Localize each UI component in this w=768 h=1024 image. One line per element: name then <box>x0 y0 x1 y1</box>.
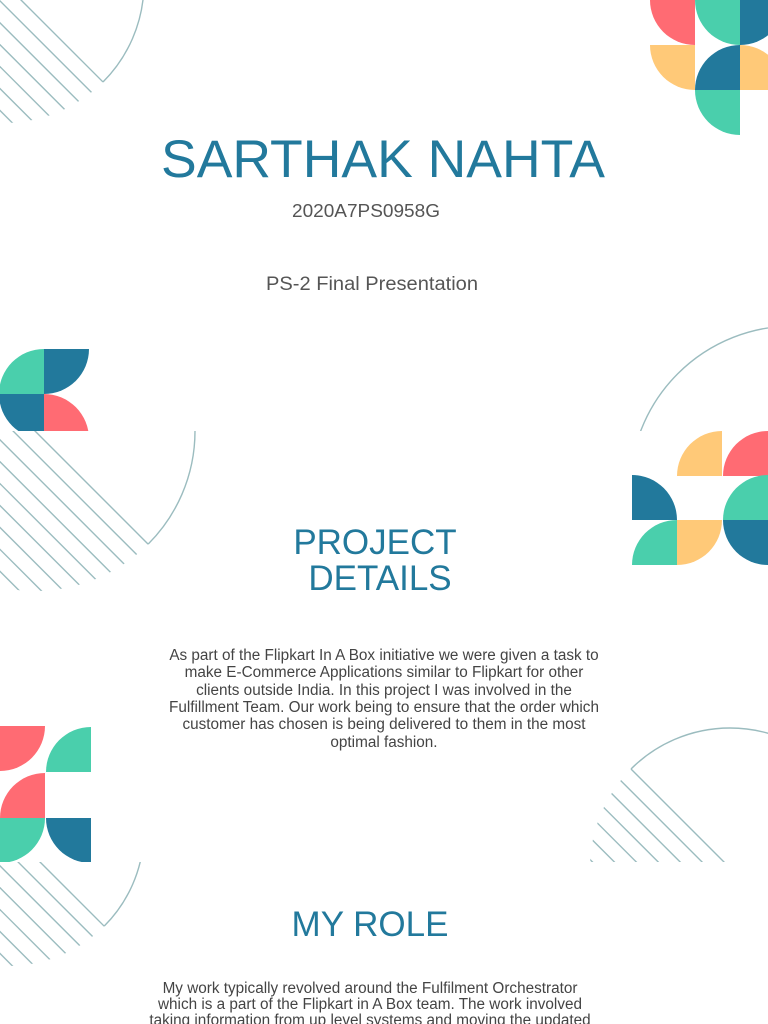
paragraph: project details: make E-Commerce Applications similar to Flipkart for other <box>185 664 583 681</box>
paragraph: my role: which is a part of the Flipkart in A Box team. The work involved <box>157 996 582 1013</box>
title: SARTHAK NAHTA <box>161 130 606 189</box>
paragraph: my role: My work typically revolved around the Fulfilment Orchestrator <box>163 980 577 997</box>
paragraph: project details: clients outside India. In this project I was involved in the <box>196 682 572 699</box>
heading: project details: PROJECT <box>293 523 457 562</box>
paragraph: project details: Fulfillment Team. Our work being to ensure that the order which <box>169 699 599 716</box>
paragraph: project details <box>169 647 599 751</box>
cluster: right-middle quarter circles <box>632 431 768 565</box>
heading: my role: MY ROLE <box>292 905 448 944</box>
motif: left-middle stripes <box>0 431 196 591</box>
heading: project details: DETAILS <box>308 559 452 598</box>
paragraph: project details: optimal fashion. <box>330 734 438 751</box>
paragraph: project details: As part of the Flipkart In A Box initiative we were given a task to <box>169 647 599 664</box>
motif: top-left stripes <box>0 0 144 123</box>
subtitle: id: 2020A7PS0958G <box>292 201 440 221</box>
paragraph: project details: customer has chosen is being delivered to them in the most <box>182 716 586 733</box>
motif: right-lower stripes <box>590 727 768 862</box>
cluster: left-middle quarter circles <box>0 349 89 439</box>
motif: left-lower stripes <box>0 862 141 966</box>
subtitle: presentation: PS-2 Final Presentation <box>266 274 478 295</box>
heading: project details <box>293 523 457 598</box>
cluster: left-lower quarter circles <box>0 726 91 863</box>
motif: right-middle arc <box>640 327 768 431</box>
paragraph: my role <box>149 980 591 1024</box>
cluster: top-right quarter circles <box>650 0 768 135</box>
